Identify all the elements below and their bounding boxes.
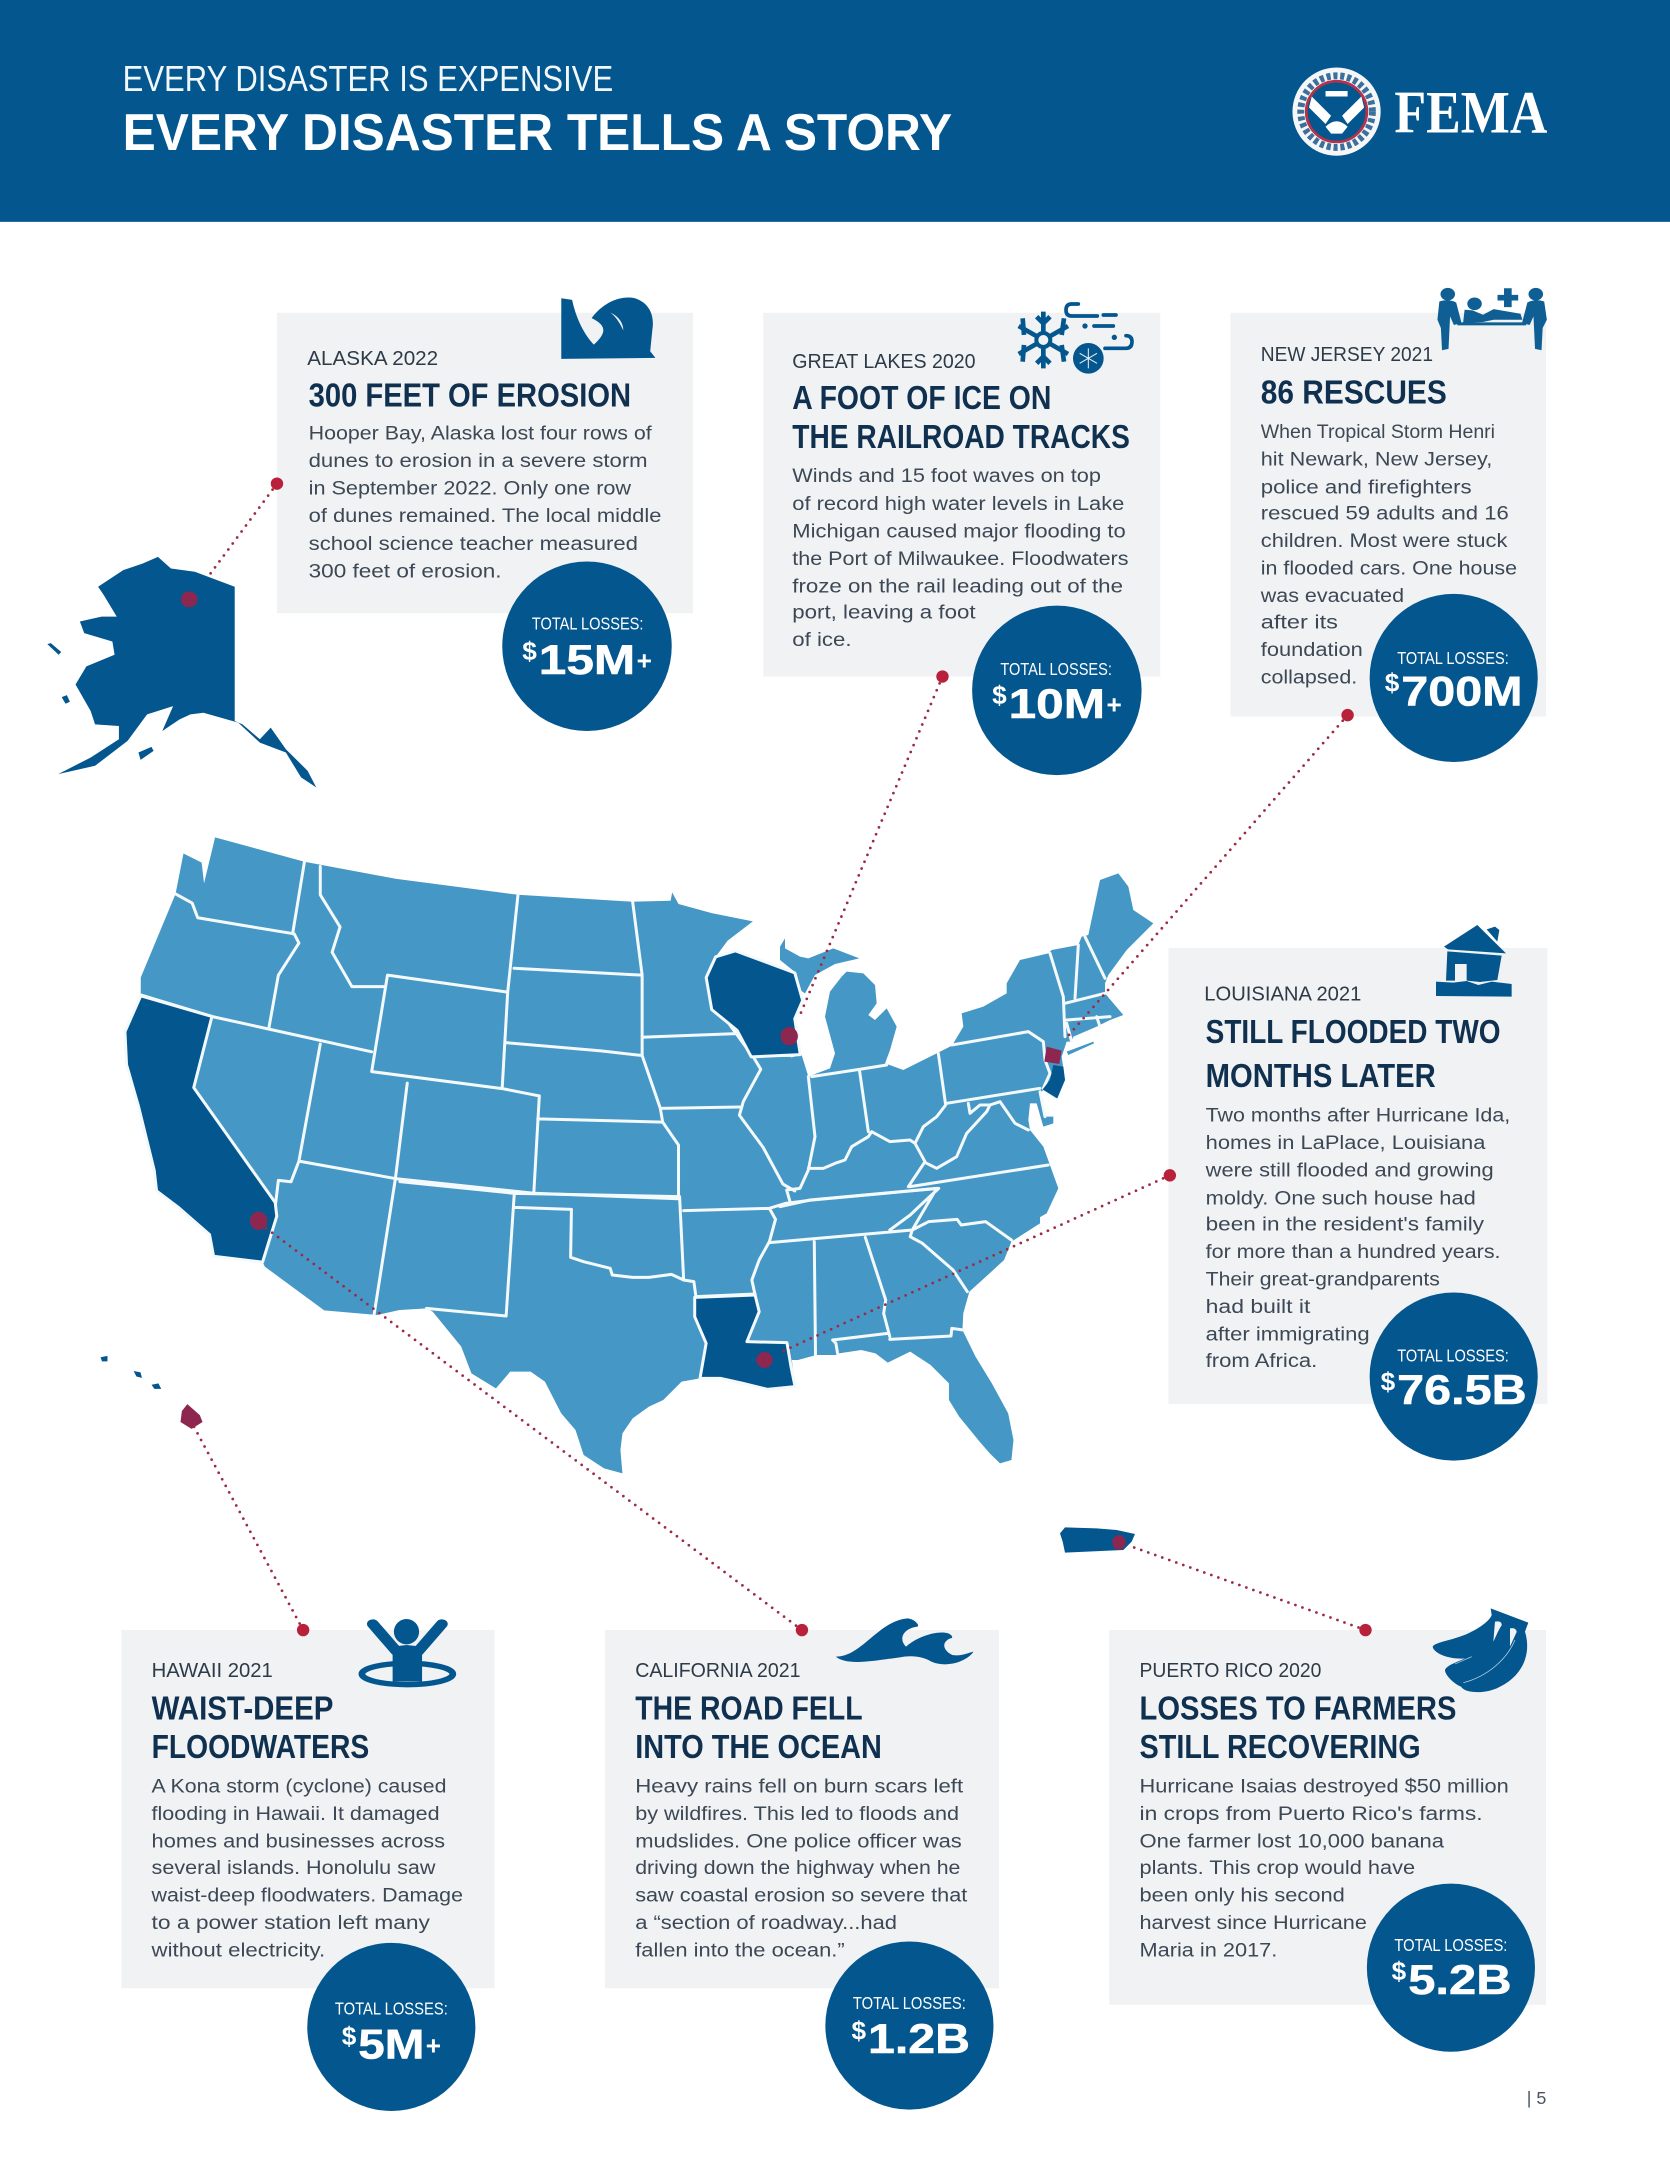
map: Puerto Rico bbox=[1060, 1527, 1135, 1553]
Louisiana location label: LOUISIANA 2021 bbox=[1204, 982, 1361, 1005]
badge: Puerto Rico total losses: 5.2B bbox=[1408, 1957, 1512, 2003]
Hawaii body text: waist-deep floodwaters. Damage bbox=[150, 1885, 463, 1907]
icon: person in floodwater bbox=[362, 1619, 453, 1685]
Great Lakes body text: Winds and 15 foot waves on top bbox=[792, 465, 1101, 487]
panel: Hawaii 2021 bbox=[121, 1630, 495, 1988]
Alaska body text: school science teacher measured bbox=[309, 533, 638, 555]
badge: Great Lakes total losses: 10M bbox=[1009, 681, 1105, 727]
badge: Louisiana total losses: TOTAL LOSSES: bbox=[1397, 1345, 1509, 1365]
Hawaii heading: FLOODWATERS bbox=[152, 1728, 369, 1766]
Great Lakes body text: of record high water levels in Lake bbox=[792, 493, 1124, 515]
Louisiana body text: after immigrating bbox=[1206, 1324, 1370, 1346]
Louisiana body text: from Africa. bbox=[1206, 1350, 1317, 1372]
Great Lakes body text: froze on the rail leading out of the bbox=[792, 575, 1123, 597]
Louisiana body text: had built it bbox=[1206, 1296, 1311, 1318]
Hawaii heading bbox=[152, 1690, 369, 1766]
Louisiana heading bbox=[1206, 1013, 1501, 1095]
Puerto Rico heading bbox=[1140, 1690, 1456, 1766]
California body text bbox=[635, 1776, 968, 1962]
header banner bbox=[0, 0, 1670, 222]
connector: California bbox=[262, 1225, 808, 1636]
Hawaii body text: A Kona storm (cyclone) caused bbox=[152, 1776, 446, 1798]
badge: Hawaii total losses: $ bbox=[342, 2021, 357, 2051]
Louisiana body text: Their great-grandparents bbox=[1206, 1269, 1440, 1291]
badge: Puerto Rico total losses: TOTAL LOSSES: bbox=[1394, 1935, 1507, 1955]
badge: Alaska total losses: $ bbox=[522, 636, 537, 666]
Alaska body text: of dunes remained. The local middle bbox=[309, 505, 661, 527]
California body text: mudslides. One police officer was bbox=[635, 1831, 962, 1853]
New Jersey body text: When Tropical Storm Henri bbox=[1261, 421, 1495, 443]
New Jersey heading: 86 RESCUES bbox=[1261, 374, 1447, 412]
Louisiana body text: been in the resident's family bbox=[1206, 1213, 1484, 1235]
icon: flooded house bbox=[1436, 925, 1512, 997]
badge: Great Lakes total losses bbox=[972, 606, 1142, 775]
badge: Alaska total losses: 15M bbox=[539, 637, 635, 683]
badge: Great Lakes total losses: $ bbox=[992, 680, 1007, 710]
Puerto Rico body text: been only his second bbox=[1140, 1885, 1345, 1907]
California heading: INTO THE OCEAN bbox=[635, 1728, 882, 1766]
Great Lakes body text: of ice. bbox=[792, 629, 852, 651]
Alaska body text bbox=[309, 423, 661, 582]
Louisiana body text: moldy. One such house had bbox=[1206, 1187, 1476, 1209]
panel: Louisiana 2021 bbox=[1168, 948, 1547, 1404]
badge: Alaska total losses: + bbox=[637, 646, 652, 676]
connector: Alaska bbox=[207, 477, 283, 579]
Alaska heading: 300 FEET OF EROSION bbox=[309, 376, 631, 414]
New Jersey location label: NEW JERSEY 2021 bbox=[1261, 343, 1433, 366]
Great Lakes heading bbox=[792, 379, 1130, 456]
Great Lakes heading: THE RAILROAD TRACKS bbox=[792, 418, 1130, 456]
Louisiana body text: were still flooded and growing bbox=[1205, 1160, 1494, 1182]
panel: California 2021 bbox=[605, 1630, 999, 1988]
badge: New Jersey total losses bbox=[1370, 594, 1538, 762]
New Jersey body text bbox=[1260, 421, 1517, 688]
badge: Alaska total losses bbox=[502, 561, 672, 731]
New Jersey body text: in flooded cars. One house bbox=[1261, 558, 1517, 580]
California body text: Heavy rains fell on burn scars left bbox=[635, 1776, 964, 1798]
badge: California total losses: $ bbox=[852, 2015, 867, 2045]
header subtitle: EVERY DISASTER IS EXPENSIVE bbox=[123, 59, 613, 99]
badge: Hawaii total losses: TOTAL LOSSES: bbox=[335, 1998, 448, 2018]
connector: Hawaii bbox=[193, 1425, 309, 1636]
Puerto Rico heading: STILL RECOVERING bbox=[1140, 1728, 1421, 1766]
Hawaii heading: WAIST-DEEP bbox=[152, 1690, 333, 1728]
Puerto Rico body text: Hurricane Isaias destroyed $50 million bbox=[1140, 1776, 1509, 1798]
icon: ocean wave bbox=[836, 1618, 973, 1664]
badge: Alaska total losses: TOTAL LOSSES: bbox=[532, 614, 643, 634]
New Jersey body text: foundation bbox=[1261, 639, 1363, 661]
Hawaii body text bbox=[150, 1776, 463, 1962]
Louisiana heading: MONTHS LATER bbox=[1206, 1057, 1436, 1095]
panel: Great Lakes 2020 bbox=[763, 313, 1160, 677]
New Jersey body text: hit Newark, New Jersey, bbox=[1261, 449, 1492, 471]
panel: Alaska 2022 bbox=[277, 313, 693, 613]
Alaska body text: Hooper Bay, Alaska lost four rows of bbox=[309, 423, 652, 445]
California body text: fallen into the ocean.” bbox=[635, 1940, 845, 1962]
Hawaii body text: without electricity. bbox=[150, 1940, 325, 1962]
New Jersey body text: was evacuated bbox=[1260, 585, 1404, 607]
Great Lakes location label: GREAT LAKES 2020 bbox=[792, 350, 976, 373]
panel: New Jersey 2021 bbox=[1230, 313, 1546, 717]
badge: California total losses: 1.2B bbox=[868, 2016, 970, 2062]
Great Lakes body text: Michigan caused major flooding to bbox=[792, 520, 1126, 542]
Hawaii body text: flooding in Hawaii. It damaged bbox=[152, 1803, 440, 1825]
New Jersey body text: collapsed. bbox=[1261, 666, 1357, 688]
connector: Louisiana bbox=[779, 1169, 1176, 1353]
California location label: CALIFORNIA 2021 bbox=[635, 1659, 801, 1682]
connector: Puerto Rico bbox=[1130, 1546, 1372, 1636]
Puerto Rico body text: Maria in 2017. bbox=[1140, 1940, 1277, 1962]
New Jersey body text: children. Most were stuck bbox=[1261, 530, 1508, 552]
Puerto Rico body text: harvest since Hurricane bbox=[1140, 1912, 1367, 1934]
New Jersey body text: rescued 59 adults and 16 bbox=[1261, 502, 1509, 524]
badge: Louisiana total losses: $ bbox=[1381, 1366, 1396, 1396]
Great Lakes body text bbox=[792, 465, 1129, 651]
header title: EVERY DISASTER TELLS A STORY bbox=[123, 104, 952, 162]
Louisiana body text: Two months after Hurricane Ida, bbox=[1206, 1105, 1510, 1127]
badge: New Jersey total losses: TOTAL LOSSES: bbox=[1397, 648, 1509, 668]
Louisiana body text bbox=[1205, 1105, 1510, 1372]
California heading bbox=[635, 1690, 882, 1766]
Hawaii location label: HAWAII 2021 bbox=[152, 1659, 273, 1682]
badge: Hawaii total losses: + bbox=[426, 2030, 441, 2060]
connector: New Jersey bbox=[1068, 709, 1354, 1036]
badge: New Jersey total losses: 700M bbox=[1401, 668, 1523, 714]
Alaska body text: in September 2022. Only one row bbox=[309, 478, 632, 500]
icon: bananas bbox=[1433, 1608, 1528, 1692]
California body text: driving down the highway when he bbox=[635, 1857, 960, 1879]
FEMA wordmark: FEMA bbox=[1394, 79, 1548, 146]
Hawaii body text: to a power station left many bbox=[152, 1912, 430, 1934]
icon: eroding dune bbox=[561, 298, 655, 359]
California body text: by wildfires. This led to floods and bbox=[635, 1803, 959, 1825]
Puerto Rico heading: LOSSES TO FARMERS bbox=[1140, 1690, 1456, 1728]
California body text: saw coastal erosion so severe that bbox=[635, 1885, 968, 1907]
Hawaii body text: several islands. Honolulu saw bbox=[152, 1857, 436, 1879]
badge: Hawaii total losses bbox=[307, 1943, 475, 2111]
map: contiguous United States bbox=[125, 837, 1153, 1473]
Louisiana body text: for more than a hundred years. bbox=[1206, 1241, 1501, 1263]
Hawaii body text: homes and businesses across bbox=[152, 1831, 445, 1853]
Great Lakes body text: the Port of Milwaukee. Floodwaters bbox=[792, 548, 1129, 570]
California heading: THE ROAD FELL bbox=[635, 1690, 863, 1728]
badge: Puerto Rico total losses: $ bbox=[1392, 1956, 1407, 1986]
panel: Puerto Rico 2020 bbox=[1109, 1630, 1546, 2005]
icon: snow and wind bbox=[1019, 304, 1132, 374]
badge: Puerto Rico total losses bbox=[1367, 1884, 1535, 2052]
New Jersey body text: after its bbox=[1261, 611, 1338, 633]
Puerto Rico body text: One farmer lost 10,000 banana bbox=[1140, 1831, 1444, 1853]
Louisiana body text: homes in LaPlace, Louisiana bbox=[1206, 1132, 1485, 1154]
badge: Louisiana total losses bbox=[1370, 1292, 1538, 1461]
badge: California total losses bbox=[825, 1941, 993, 2110]
Puerto Rico body text: in crops from Puerto Rico's farms. bbox=[1140, 1803, 1483, 1825]
connector: Great Lakes bbox=[799, 670, 949, 1017]
FEMA seal bbox=[1292, 68, 1381, 156]
Louisiana heading: STILL FLOODED TWO bbox=[1206, 1013, 1501, 1051]
Great Lakes body text: port, leaving a foot bbox=[792, 602, 976, 624]
Puerto Rico body text bbox=[1140, 1776, 1509, 1962]
badge: California total losses: TOTAL LOSSES: bbox=[853, 1993, 966, 2013]
badge: Great Lakes total losses: TOTAL LOSSES: bbox=[1000, 659, 1112, 679]
California body text: a “section of roadway...had bbox=[635, 1912, 897, 1934]
New Jersey body text: police and firefighters bbox=[1261, 476, 1472, 498]
Puerto Rico body text: plants. This crop would have bbox=[1140, 1857, 1415, 1879]
Alaska body text: dunes to erosion in a severe storm bbox=[309, 450, 648, 472]
badge: Louisiana total losses: 76.5B bbox=[1397, 1367, 1527, 1413]
icon: stretcher rescue bbox=[1437, 288, 1547, 350]
Alaska body text: 300 feet of erosion. bbox=[309, 560, 502, 582]
Alaska location label: ALASKA 2022 bbox=[307, 347, 438, 370]
badge: New Jersey total losses: $ bbox=[1385, 668, 1400, 698]
Great Lakes heading: A FOOT OF ICE ON bbox=[792, 379, 1051, 417]
Puerto Rico location label: PUERTO RICO 2020 bbox=[1140, 1659, 1321, 1682]
map: Alaska bbox=[47, 557, 316, 787]
badge: Hawaii total losses: 5M bbox=[358, 2022, 424, 2068]
map: Hawaii islands bbox=[101, 1356, 203, 1429]
badge: Great Lakes total losses: + bbox=[1106, 690, 1122, 720]
page number: | 5 bbox=[1527, 2088, 1546, 2108]
